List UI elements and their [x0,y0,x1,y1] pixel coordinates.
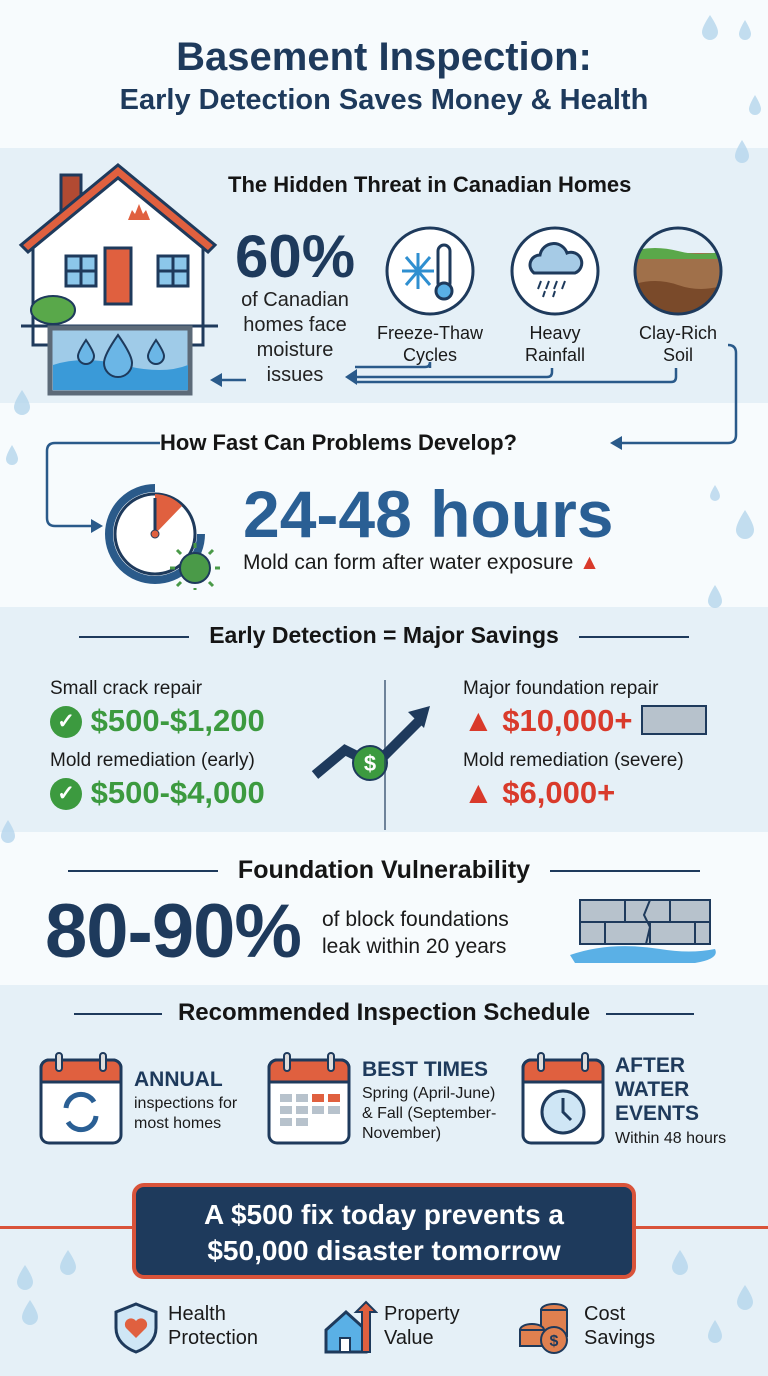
stat: 60%: issues [267,364,323,386]
benefit: cost savings: Cost [584,1303,625,1325]
text: leak within 20 years [322,935,506,958]
text: of block foundations [322,908,509,931]
icon: rising arrow with dollar [312,706,430,781]
callout: $500 fix [132,1183,636,1279]
schedule: after water events: AFTER [615,1054,685,1077]
benefit: property value [324,1300,460,1354]
icon: heavy rainfall: Rainfall [525,345,585,365]
icon: freeze-thaw [377,226,483,365]
benefit: cost savings: $ [550,1333,559,1350]
schedule: best times: November) [362,1125,441,1142]
stat: 60%: 60% [235,223,355,290]
benefit: health protection: Protection [168,1327,258,1349]
benefit: health protection: Health [168,1303,226,1325]
savings: late costs [463,678,707,810]
savings: early costs: $500-$4,000 [91,775,265,810]
heading: how fast: How Fast Can Problems Develop? [160,430,517,455]
icon: cracked block wall [570,899,716,963]
icon: clay soil: Clay-Rich [639,323,717,343]
schedule: best times: Spring (April-June) [362,1085,495,1102]
icon: house with flooded basement [18,163,218,396]
savings: late costs: ▲ $10,000+ [463,703,632,738]
icon: clay soil: Soil [663,345,693,365]
icon: clay soil [634,226,722,365]
schedule: best times: BEST TIMES [362,1058,488,1081]
savings: late costs: Mold remediation (severe) [463,750,684,771]
icon: heavy rainfall: Heavy [529,323,581,343]
arrows: factors to stat [46,344,738,533]
stat: 24-48 hours: 24-48 hours [243,477,613,551]
icon: freeze-thaw: Freeze-Thaw [377,323,483,343]
icon: freeze-thaw: Cycles [403,345,457,365]
benefit: health protection [114,1302,258,1354]
schedule: best times: & Fall (September- [362,1105,496,1122]
stat: 80-90%: 80-90% [45,889,301,974]
title: Basement Inspection: [176,35,592,79]
schedule: after water events: WATER [615,1078,689,1101]
heading: inspection schedule: Recommended Inspection Schedule [178,999,590,1026]
icon: timer with mold [105,484,220,590]
schedule: after water events [522,1052,726,1147]
stat: 60%: moisture [257,339,333,361]
savings: early costs: Mold remediation (early) [50,750,255,771]
icon: heavy rainfall [510,226,600,365]
title: Early Detection Saves Money & Health [120,84,648,116]
benefit: property value: Property [384,1303,460,1325]
stat: 60%: homes face [243,314,347,336]
title [120,35,648,116]
schedule: annual [40,1052,237,1144]
benefit: property value: Value [384,1327,434,1349]
benefit: cost savings [519,1303,655,1354]
savings: early costs: $500-$1,200 [91,703,265,738]
schedule: annual: ANNUAL [134,1068,223,1091]
savings: early costs [50,678,265,810]
heading: early detection: Early Detection = Major Savings [209,622,559,648]
savings: early costs: ✓ [57,782,75,805]
heading: hidden threat: The Hidden Threat in Canadian Homes [228,172,631,197]
savings: late costs: Major foundation repair [463,678,658,699]
callout: $500 fix: A $500 fix today prevents a [204,1199,564,1230]
schedule: annual: inspections for [134,1095,237,1112]
savings: early costs: Small crack repair [50,678,202,699]
stat: 24-48 hours: Mold can form after water exposure ▲ [243,551,600,574]
heading: foundation vulnerability: Foundation Vulnerability [238,856,530,884]
schedule: after water events: Within 48 hours [615,1130,726,1147]
icon: rising arrow with dollar: $ [364,751,376,776]
red line behind callout [0,1226,768,1229]
schedule: annual: most homes [134,1115,221,1132]
schedule: best times [268,1052,496,1144]
stat: 60% [235,223,355,386]
schedule: after water events: EVENTS [615,1102,699,1125]
savings: late costs: ▲ $6,000+ [463,775,615,810]
savings: early costs: ✓ [57,710,75,733]
benefit: cost savings: Savings [584,1327,655,1349]
stat: 60%: of Canadian [241,289,349,311]
callout: $500 fix: $50,000 disaster tomorrow [207,1235,561,1266]
